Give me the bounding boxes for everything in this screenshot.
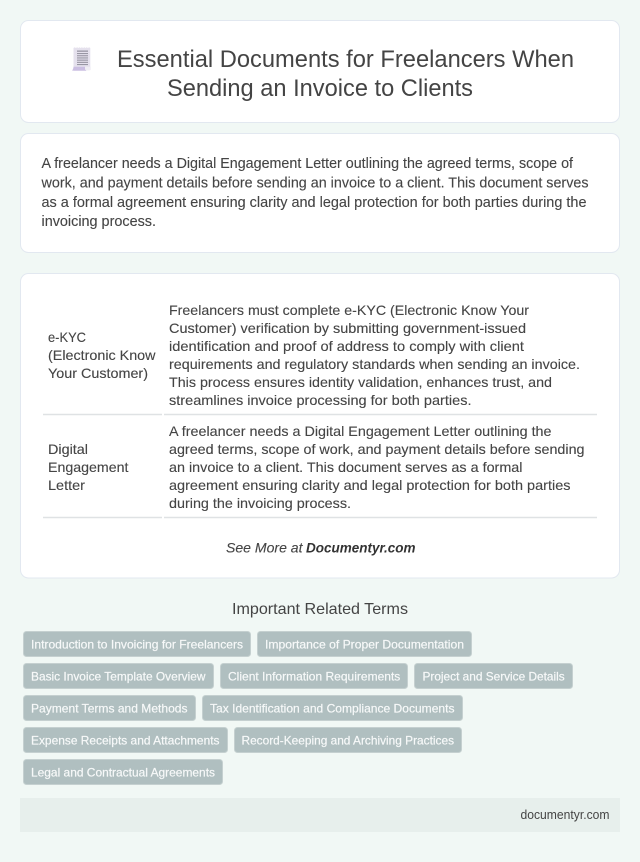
- description: Digital Engagement Letter: A freelancer needs a Digital Engagement Letter outlining the: [169, 423, 552, 439]
- introduction paragraph: invoicing process.: [42, 214, 156, 230]
- description: e-KYC: This process ensures identity validation, enhances trust, and: [169, 374, 552, 390]
- description: e-KYC: streamlines invoice processing for both parties.: [169, 392, 472, 408]
- tag: Tax Identification and Compliance Documents: Tax Identification and Compliance Documents: [210, 701, 454, 715]
- tag: Project and Service Details: [414, 664, 572, 688]
- see more link: See More at: [226, 540, 304, 556]
- panel: title header: [20, 20, 620, 122]
- tag: Payment Terms and Methods: [24, 696, 196, 720]
- tag: Introduction to Invoicing for Freelancers: [24, 632, 250, 656]
- tag: Payment Terms and Methods: Payment Terms and Methods: [31, 701, 187, 715]
- introduction paragraph: [41, 156, 588, 230]
- icon: paper receipt document: [72, 47, 91, 71]
- description: Digital Engagement Letter: during the invoicing process.: [169, 495, 351, 511]
- description: Digital Engagement Letter: agreed terms, scope of work, and payment details before sending: [169, 441, 584, 457]
- description: Digital Engagement Letter: agreement ensuring clarity and legal protection for both parties: [169, 477, 570, 493]
- tag: Project and Service Details: Project and Service Details: [422, 669, 565, 683]
- description: e-KYC: Customer) verification by submitting government-issued: [169, 320, 526, 336]
- description: e-KYC: Freelancers must complete e-KYC (Electronic Know Your: [169, 302, 529, 318]
- tag: Expense Receipts and Attachments: Expense Receipts and Attachments: [31, 733, 220, 747]
- panel: documents table: [20, 274, 620, 578]
- table row: e-KYC: [48, 302, 580, 408]
- description: e-KYC: identification and proof of address to comply with client: [169, 338, 524, 354]
- tag list: related terms: [24, 632, 572, 784]
- description: e-KYC: [169, 302, 580, 408]
- term: Digital Engagement Letter: [48, 441, 129, 493]
- tag: Legal and Contractual Agreements: [24, 760, 222, 784]
- tag: Basic Invoice Template Overview: Basic Invoice Template Overview: [31, 669, 206, 683]
- tag: Client Information Requirements: [220, 664, 408, 688]
- tag: Record-Keeping and Archiving Practices: Record-Keeping and Archiving Practices: [242, 733, 454, 747]
- table row: Digital Engagement Letter: [48, 423, 584, 511]
- title text: Essential Documents for Freelancers When: [117, 46, 574, 73]
- introduction paragraph: as a formal agreement ensuring clarity and legal protection for both parties during the: [42, 195, 586, 211]
- tag: Basic Invoice Template Overview: [24, 664, 214, 688]
- term: e-KYC: (Electronic Know: [48, 347, 156, 363]
- heading: important related terms: Important Related Terms: [232, 601, 408, 618]
- tag: Tax Identification and Compliance Documents: [202, 696, 462, 720]
- footer bar: documentyr.com: [520, 808, 610, 822]
- description: Digital Engagement Letter: [169, 423, 584, 511]
- description: e-KYC: requirements and regulatory standards when sending an invoice.: [169, 356, 580, 372]
- description: Digital Engagement Letter: an invoice to a client. This document serves as a formal: [169, 459, 522, 475]
- tag: Client Information Requirements: Client Information Requirements: [228, 669, 400, 683]
- tag: Record-Keeping and Archiving Practices: [234, 728, 462, 752]
- term: Digital Engagement Letter: Letter: [48, 477, 85, 493]
- see more link: [226, 540, 416, 556]
- footer bar: [20, 798, 620, 832]
- tag: Importance of Proper Documentation: [258, 632, 472, 656]
- term: Digital Engagement Letter: Engagement: [48, 459, 129, 475]
- term: Digital Engagement Letter: Digital: [48, 441, 88, 457]
- introduction paragraph: work, and payment details before sending an invoice to a client. This document serves: [41, 176, 588, 192]
- introduction paragraph: A freelancer needs a Digital Engagement Letter outlining the agreed terms, scope of: [42, 156, 574, 172]
- panel: introduction: [20, 134, 620, 252]
- tag: Importance of Proper Documentation: Importance of Proper Documentation: [265, 637, 464, 651]
- tag: Introduction to Invoicing for Freelancers: Introduction to Invoicing for Freelancers: [31, 637, 243, 651]
- tag: Expense Receipts and Attachments: [24, 728, 228, 752]
- title text: [117, 46, 574, 102]
- term: e-KYC: [48, 329, 156, 381]
- tag: Legal and Contractual Agreements: Legal and Contractual Agreements: [31, 765, 215, 779]
- see more link: Documentyr.com: [306, 540, 416, 556]
- title text: Sending an Invoice to Clients: [167, 75, 473, 102]
- term: e-KYC: e-KYC: [48, 329, 86, 345]
- term: e-KYC: Your Customer): [48, 365, 148, 381]
